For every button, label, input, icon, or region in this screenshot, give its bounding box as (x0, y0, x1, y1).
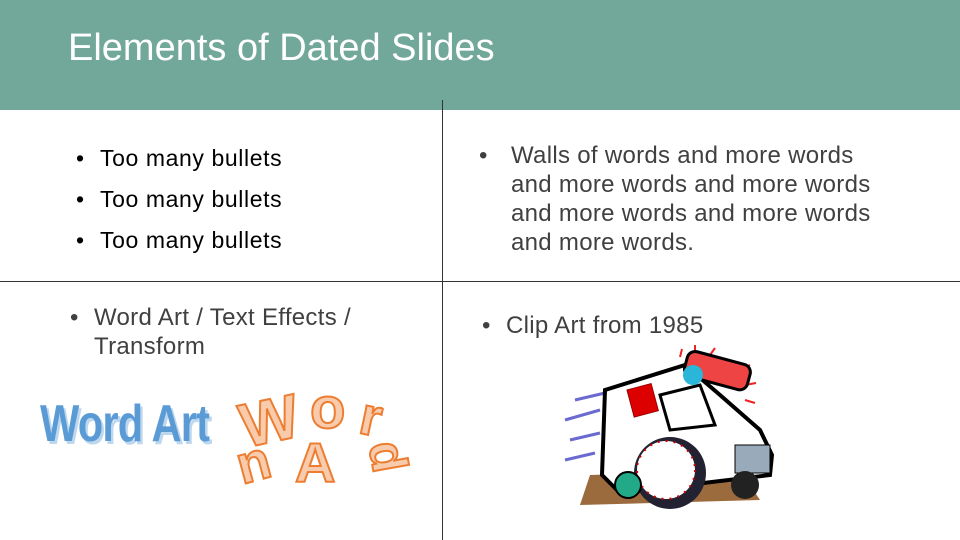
word art: orange warped: r (355, 386, 388, 449)
word art: blue: Word Art (40, 395, 209, 453)
panel: clip art bullet: Clip Art from 1985 (506, 312, 703, 339)
header band (0, 0, 960, 110)
panel: too many bullets (76, 145, 282, 253)
text: • (479, 142, 488, 169)
title: Elements of Dated Slides (68, 27, 495, 69)
panel: too many bullets: Too many bullets (100, 186, 282, 212)
panel: word art bullet: Word Art / Text Effects / Transform (94, 304, 351, 360)
word art: orange warped: d (358, 437, 418, 476)
panel: too many bullets: Too many bullets (100, 145, 282, 171)
word art: orange warped: W (235, 382, 306, 461)
word art: orange warped (235, 380, 418, 485)
clip art: ambulance (564, 345, 774, 509)
panel: walls of words: Walls of words and more words and more words and more words and more words and more words and more words. (511, 142, 871, 256)
panel: too many bullets: Too many bullets (100, 227, 282, 253)
